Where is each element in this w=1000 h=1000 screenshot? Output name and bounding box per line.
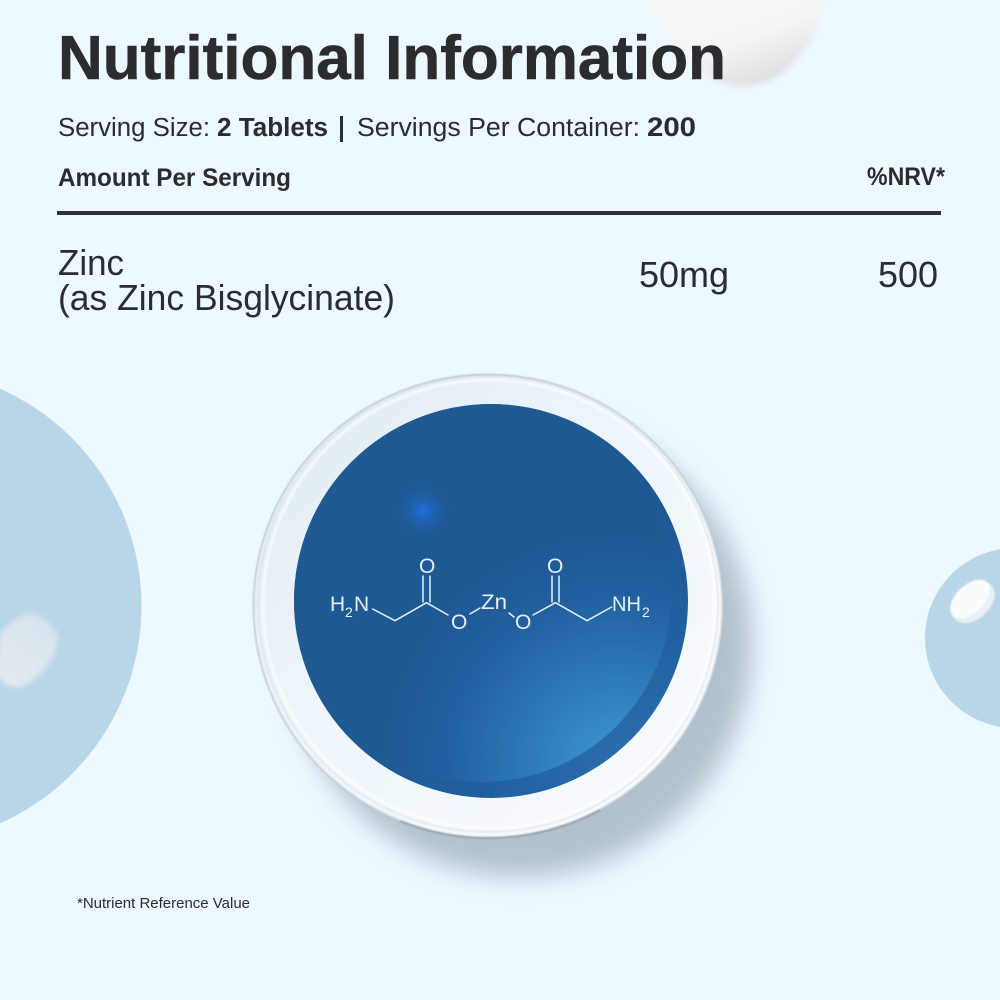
table rule: [57, 211, 941, 215]
disc outer rim: [253, 374, 723, 838]
serving information: Servings Per Container:: [357, 114, 640, 142]
molecule: zinc bisglycinate: O: [547, 555, 563, 578]
molecule: zinc bisglycinate: O: [451, 611, 467, 634]
tablet: right: [943, 572, 1000, 631]
light spot: [395, 483, 451, 539]
nutrient name: Zinc: [58, 242, 124, 283]
serving information: 2 Tablets: [217, 114, 328, 142]
serving information: [58, 112, 696, 142]
tablet: top, blurred: [642, 0, 824, 86]
disc shadow: [288, 413, 752, 877]
molecule: zinc bisglycinate: H: [330, 593, 345, 616]
serving information: 200: [647, 112, 696, 142]
molecule: zinc bisglycinate: 2: [642, 604, 650, 620]
nutrient name: [58, 242, 395, 318]
molecule: zinc bisglycinate: NH: [612, 593, 641, 616]
nutrient amount: 50mg: [639, 254, 729, 295]
blue inner circle: [292, 402, 688, 798]
decorative circle: left: [0, 368, 142, 844]
decorative circle: right: [925, 548, 1000, 728]
nutrient NRV value: 500: [878, 254, 938, 295]
table header: %NRV: %NRV*: [867, 163, 945, 191]
table header: amount per serving: Amount Per Serving: [58, 164, 291, 192]
footnote: *Nutrient Reference Value: [77, 895, 250, 912]
molecule: zinc bisglycinate: O: [515, 611, 531, 634]
molecule: zinc bisglycinate: N: [354, 593, 369, 616]
title: Nutritional Information: [58, 24, 726, 93]
molecule: zinc bisglycinate: O: [419, 555, 435, 578]
nutrient name: (as Zinc Bisglycinate): [58, 277, 395, 318]
molecule: zinc bisglycinate: Zn: [481, 591, 507, 614]
tablet disc with molecule: [253, 374, 752, 877]
molecule: zinc bisglycinate: 2: [345, 604, 353, 620]
tablet: left, blurred: [0, 613, 58, 687]
molecule: zinc bisglycinate: [330, 555, 650, 634]
serving information: Serving Size:: [58, 114, 210, 142]
